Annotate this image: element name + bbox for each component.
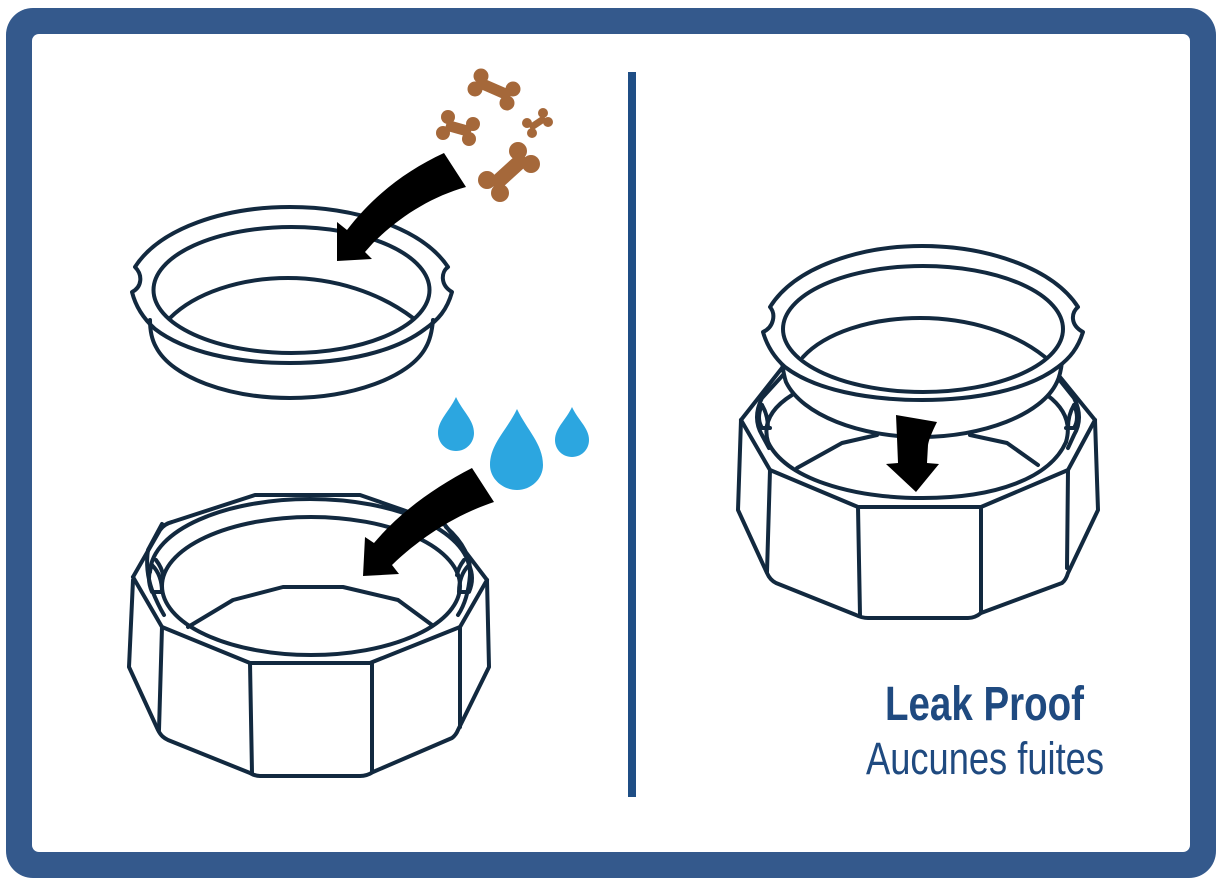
arrow: water [363, 468, 494, 576]
vertical divider [628, 72, 636, 797]
icon: water bowl [129, 495, 489, 776]
icon: assembled bowl [738, 246, 1098, 618]
arrow: food [337, 153, 466, 261]
bone 4 [478, 142, 540, 202]
icon: water drops [438, 397, 589, 490]
arrow: down into bowl [886, 415, 939, 492]
subheading: Aucunes fuites: Aucunes fuites [866, 733, 1104, 784]
inner top bowl [763, 246, 1083, 437]
bone 2 [436, 110, 480, 146]
icon: bones [436, 68, 553, 202]
bone 3 [522, 108, 553, 138]
heading: Leak Proof: Leak Proof [885, 678, 1085, 731]
icon: food bowl [132, 207, 452, 398]
bone 1 [468, 68, 520, 110]
base [738, 368, 1098, 618]
